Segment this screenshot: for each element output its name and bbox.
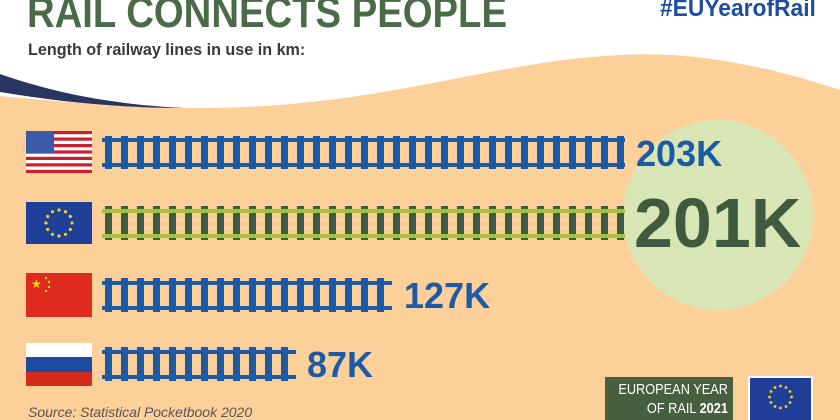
subtitle: Length of railway lines in use in km: [28, 40, 305, 59]
label: 201K: 201K [634, 184, 801, 262]
logo: European Year of Rail 2021: EUROPEAN YEAR [618, 381, 728, 398]
label: 87K: 87K [307, 344, 373, 385]
logo: European Year of Rail 2021 [605, 377, 733, 420]
label: 203K: 203K [636, 133, 722, 174]
flag: China [26, 273, 92, 317]
flag: EU [26, 202, 92, 244]
label: 127K: 127K [404, 275, 490, 316]
flag: USA [26, 131, 92, 173]
flag: Russia [26, 343, 92, 386]
logo: EU flag [748, 376, 813, 420]
logo: European Year of Rail 2021: OF RAIL 2021 [647, 400, 728, 417]
flag: China: ★ [31, 277, 42, 291]
source: Source: Statistical Pocketbook 2020 [28, 404, 252, 420]
